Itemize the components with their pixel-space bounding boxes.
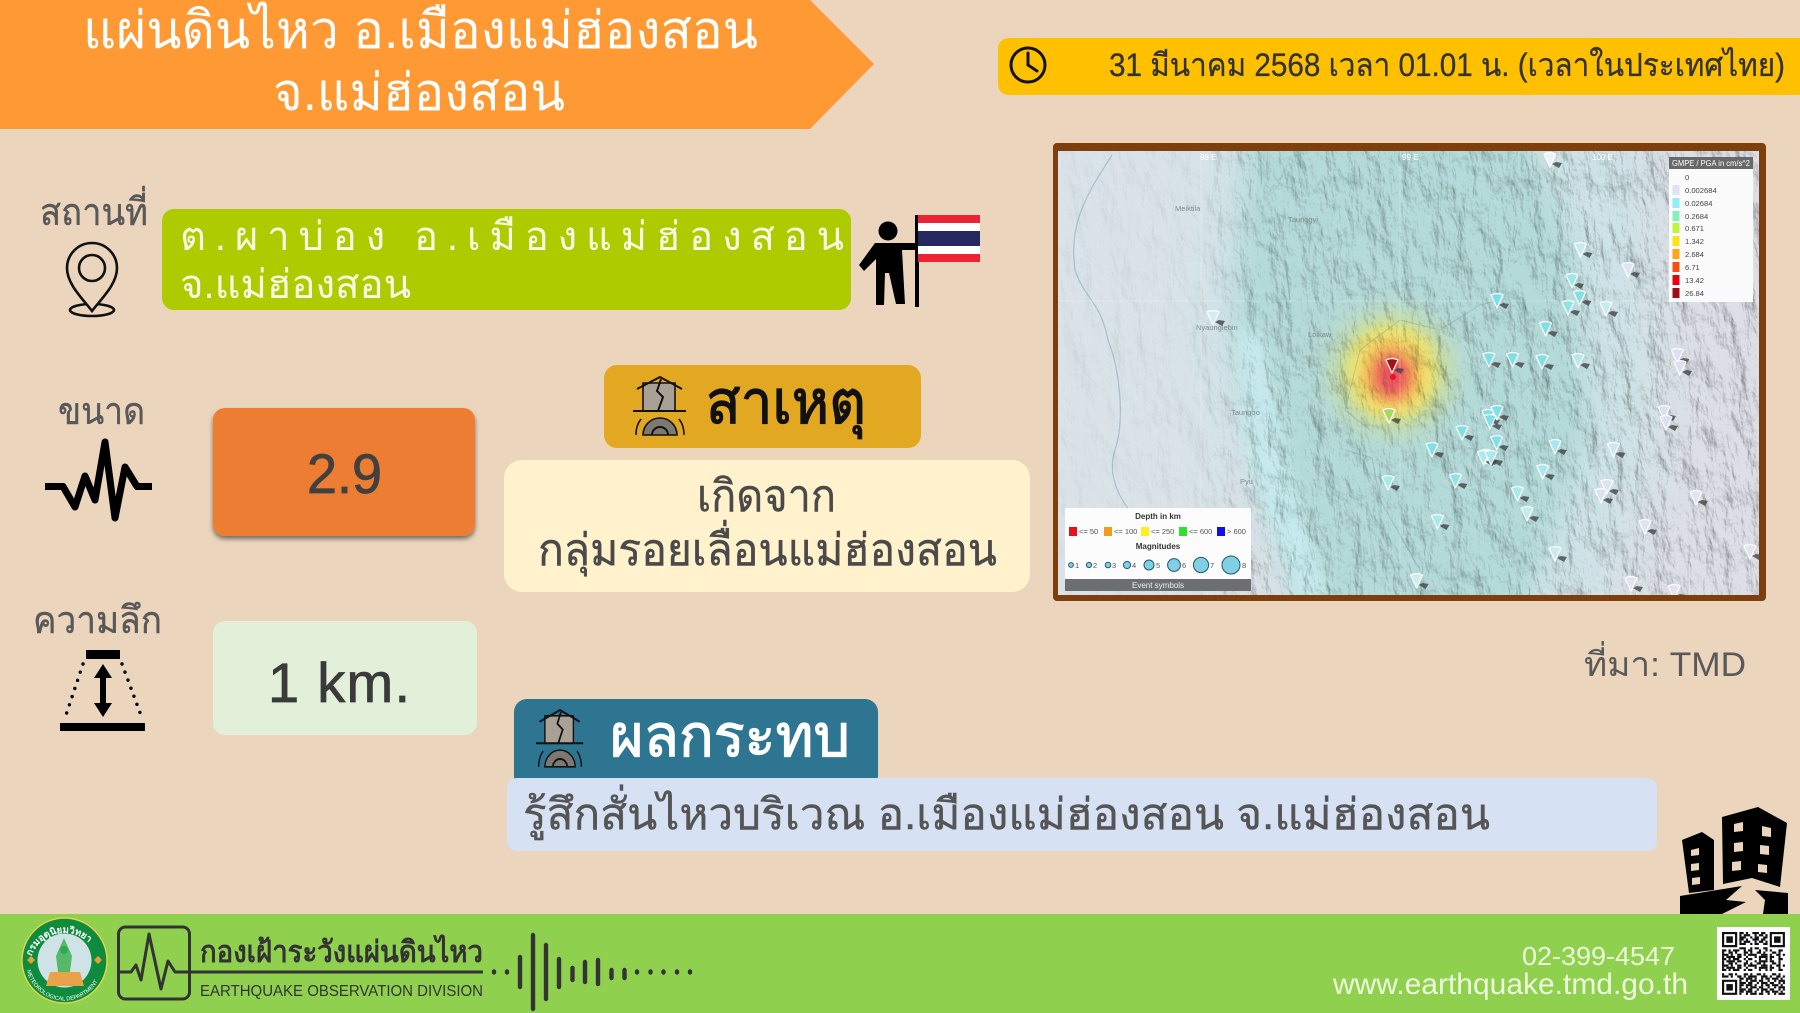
map rivers and borders xyxy=(1074,155,1290,530)
logo: Meteorological Department seal: กรมอุตุนิยมวิทยา xyxy=(27,926,91,956)
map legend: PGA scale xyxy=(1669,157,1753,302)
logo: Meteorological Department seal: METEOROLOGICAL DEPARTMENT xyxy=(27,970,97,1001)
impact heading: ผลกระทบ xyxy=(610,704,850,769)
map legend: depth and magnitudes: 1 xyxy=(1075,561,1079,570)
impact description panel xyxy=(507,778,1657,851)
icon: sound wave bars xyxy=(494,935,690,1009)
title banner xyxy=(0,0,874,129)
location label: สถานที่ xyxy=(40,186,148,234)
panel: earthquake map: 98 E xyxy=(1200,153,1216,162)
icon: collapsing buildings xyxy=(1680,807,1788,914)
map seismic stations xyxy=(1207,152,1762,600)
map legend: PGA scale: GMPE / PGA in cm/s^2 xyxy=(1672,158,1750,168)
map legend: PGA scale: 0.02684 xyxy=(1685,199,1712,208)
title banner: แผ่นดินไหว อ.เมืองแม่ฮ่องสอน xyxy=(83,1,758,60)
map legend: depth and magnitudes: 4 xyxy=(1132,561,1136,570)
cause heading xyxy=(604,365,921,448)
map legend: depth and magnitudes: Depth in km xyxy=(1135,512,1181,521)
map legend: PGA scale: 2.684 xyxy=(1685,250,1704,259)
map legend: PGA scale: 6.71 xyxy=(1685,263,1700,272)
map legend: depth and magnitudes: 8 xyxy=(1242,561,1246,570)
icon: depth arrow xyxy=(60,650,145,731)
magnitude label: ขนาด xyxy=(58,391,145,433)
map legend: depth and magnitudes: <= 250 xyxy=(1151,527,1174,536)
map legend: PGA scale: 0 xyxy=(1685,173,1689,182)
division name: กองเฝ้าระวังแผ่นดินไหว xyxy=(200,934,483,969)
map legend: PGA scale: 0.2684 xyxy=(1685,212,1708,221)
map place labels: Pyu xyxy=(1240,477,1253,486)
map hillshade terrain xyxy=(1058,151,1759,595)
icon: cracked house xyxy=(633,377,686,435)
location panel: จ.แม่ฮ่องสอน xyxy=(180,263,411,307)
depth value panel xyxy=(213,621,477,735)
cause description panel xyxy=(504,460,1030,592)
map legend: PGA scale: 1.342 xyxy=(1685,237,1704,246)
date and time bar xyxy=(998,38,1800,95)
panel: earthquake map xyxy=(1053,120,1766,620)
map shaking intensity bands xyxy=(1228,151,1656,595)
panel: earthquake map: 99 E xyxy=(1402,153,1418,162)
map legend: depth and magnitudes: 3 xyxy=(1112,561,1116,570)
map intensity hotspot xyxy=(1334,314,1450,430)
map legend: depth and magnitudes: 6 xyxy=(1182,561,1186,570)
map base layer xyxy=(1228,151,1759,595)
contact phone: 02-399-4547 xyxy=(1522,941,1675,971)
map legend: depth and magnitudes: 7 xyxy=(1210,561,1214,570)
map legend: PGA scale: 0.002684 xyxy=(1685,186,1717,195)
icon: seismic wave xyxy=(45,442,152,518)
logo: Meteorological Department seal xyxy=(21,917,108,1004)
map place labels: Taungoo xyxy=(1231,408,1260,417)
map place labels: Taunggyi xyxy=(1288,215,1318,224)
magnitude value panel: 2.9 xyxy=(307,442,382,505)
depth label: ความลึก xyxy=(33,600,162,642)
magnitude value panel xyxy=(213,408,475,536)
map place labels: Meiktila xyxy=(1175,204,1201,213)
icon: cracked house xyxy=(536,710,583,767)
panel: earthquake map: 100 E xyxy=(1592,153,1613,162)
depth value panel: 1 km. xyxy=(268,651,410,714)
map place labels: Nyaunglebin xyxy=(1196,323,1238,332)
location panel xyxy=(162,209,851,310)
map legend: depth and magnitudes: 5 xyxy=(1156,561,1160,570)
icon: location pin xyxy=(67,243,117,316)
map legend: depth and magnitudes: <= 600 xyxy=(1189,527,1212,536)
map epicentre marker xyxy=(1386,358,1404,380)
map legend: depth and magnitudes: 2 xyxy=(1093,561,1097,570)
footer bar xyxy=(0,914,1800,1013)
map legend: depth and magnitudes: <= 50 xyxy=(1079,527,1098,536)
map legend: PGA scale: 26.84 xyxy=(1685,289,1704,298)
icon: clock xyxy=(1011,48,1045,82)
map legend: depth and magnitudes: Magnitudes xyxy=(1136,542,1181,551)
icon: person with Thai flag xyxy=(859,215,980,307)
map place labels: Loikaw xyxy=(1308,330,1332,339)
division name: EARTHQUAKE OBSERVATION DIVISION xyxy=(200,983,483,1000)
source credit: ที่มา: TMD xyxy=(1584,641,1746,684)
location panel: ต.ผาบ่อง อ.เมืองแม่ฮ่องสอน xyxy=(180,215,844,259)
impact description panel: รู้สึกสั่นไหวบริเวณ อ.เมืองแม่ฮ่องสอน จ.แม่ฮ่องสอน xyxy=(523,785,1490,841)
cause description panel: กลุ่มรอยเลื่อนแม่ฮ่องสอน xyxy=(538,519,997,577)
map legend: depth and magnitudes: <= 100 xyxy=(1114,527,1137,536)
map legend: depth and magnitudes xyxy=(1065,508,1251,591)
cause description panel: เกิดจาก xyxy=(697,472,836,521)
QR code xyxy=(1717,927,1790,1000)
map legend: PGA scale: 13.42 xyxy=(1685,276,1704,285)
title banner: จ.แม่ฮ่องสอน xyxy=(273,64,565,122)
impact heading xyxy=(514,699,878,789)
icon: seismograph box xyxy=(118,927,483,999)
website: www.earthquake.tmd.go.th xyxy=(1332,968,1688,1001)
map legend: depth and magnitudes: Event symbols xyxy=(1132,581,1184,590)
division name xyxy=(200,934,483,1000)
cause heading: สาเหตุ xyxy=(706,369,866,439)
map legend: PGA scale: 0.671 xyxy=(1685,224,1704,233)
map legend: depth and magnitudes: > 600 xyxy=(1227,527,1246,536)
map place labels xyxy=(1175,204,1332,486)
